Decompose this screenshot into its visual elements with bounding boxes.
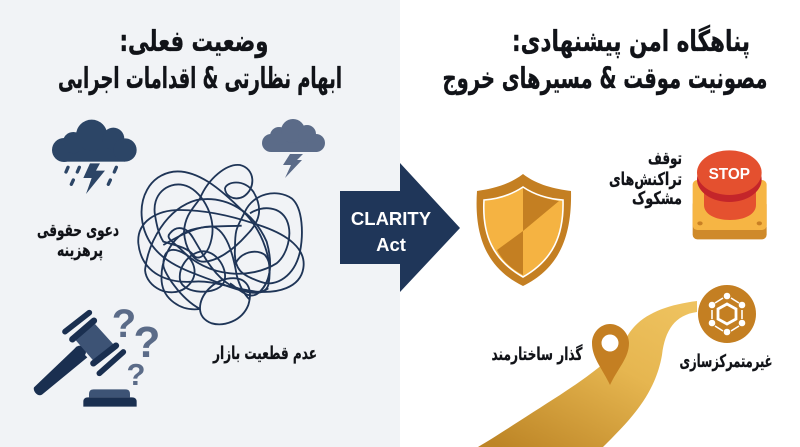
arrow: CLARITY Act: CLARITY — [351, 208, 432, 229]
heading: current status — [58, 24, 342, 95]
heading: proposed safe harbor — [442, 24, 768, 95]
label: halt suspicious transactions — [609, 149, 682, 209]
label: costly litigation: دعوی حقوقی — [37, 221, 119, 241]
road: exit path — [478, 301, 697, 447]
icon: gavel with question marks: ? — [112, 302, 136, 346]
heading: current status: ابهام نظارتی & اقدامات اجرایی — [58, 61, 342, 95]
icon: gavel with question marks: ? — [127, 357, 145, 392]
label: costly litigation — [37, 221, 119, 261]
label: market uncertainty: عدم قطعیت بازار — [212, 344, 317, 364]
chart: tangled line scribble — [138, 165, 304, 324]
label: costly litigation: پرهزینه — [57, 241, 103, 261]
label: halt suspicious transactions: توقف — [648, 149, 682, 169]
arrow: CLARITY Act: Act — [376, 234, 406, 255]
heading: current status: وضعیت فعلی: — [120, 24, 268, 58]
icon: storm cloud with rain — [52, 120, 137, 194]
icon: gavel with question marks: ? — [134, 318, 160, 367]
icon: stop button: STOP — [709, 166, 750, 183]
icon: small storm cloud — [262, 119, 325, 178]
label: structured transition: گذار ساختارمند — [492, 344, 583, 365]
panel: current status background — [0, 0, 400, 447]
panel: proposed safe harbor background — [400, 0, 800, 447]
icon: shield — [477, 174, 571, 286]
icon: gavel with question marks — [34, 302, 160, 407]
icon: decentralized network — [698, 285, 756, 343]
label: halt suspicious transactions: مشکوک — [632, 189, 682, 209]
icon: location pin — [592, 324, 629, 385]
icon: stop button — [693, 150, 767, 239]
label: halt suspicious transactions: تراکنش‌های — [609, 170, 682, 190]
arrow: CLARITY Act — [340, 163, 460, 292]
